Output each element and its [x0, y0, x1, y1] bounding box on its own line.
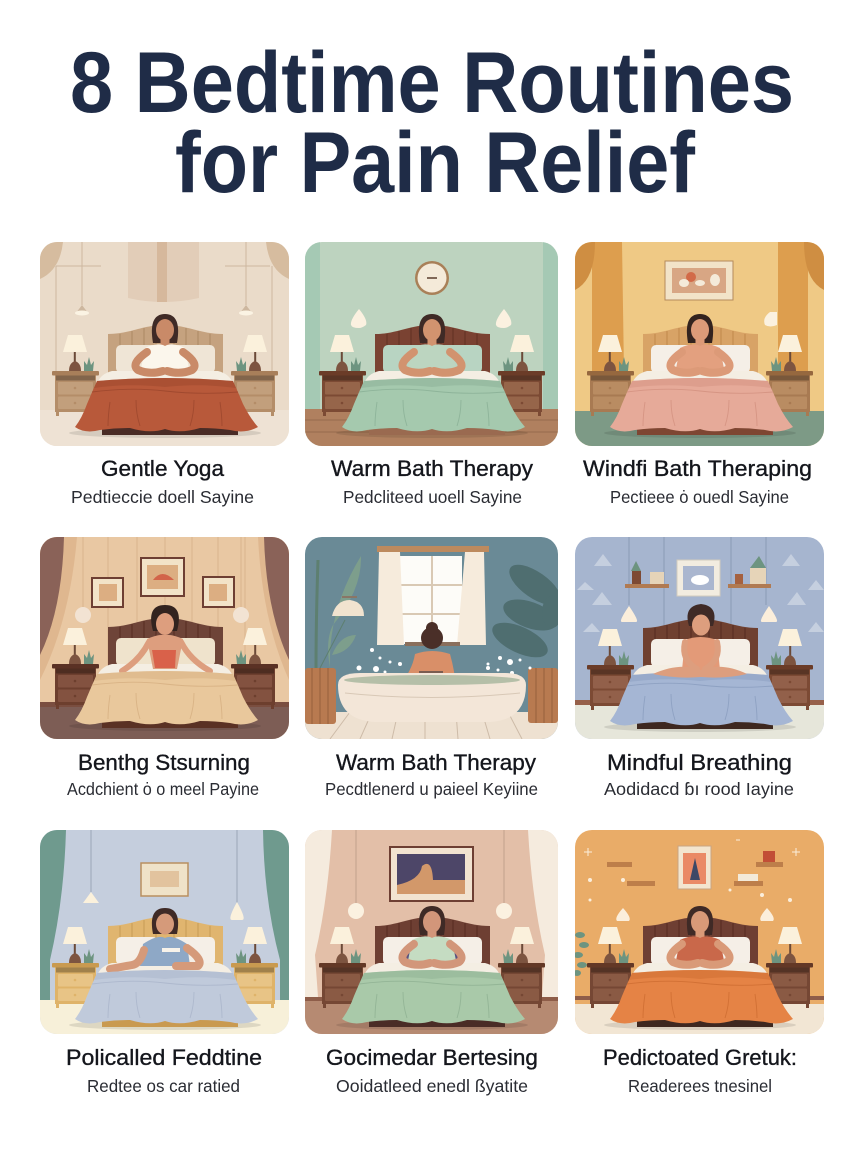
panel: mindful breathing: [575, 537, 824, 739]
person in bath: [408, 622, 454, 673]
label: benthg stsurning: [67, 750, 259, 799]
lamp: [332, 597, 364, 616]
plant left: [305, 556, 361, 724]
shelves with plants: [625, 556, 771, 588]
label: policalled feddtine: Policalled Feddtine: [66, 1045, 262, 1070]
label: gocimedar bertesing: Gocimedar Bertesing: [326, 1045, 538, 1070]
label: mindful breathing: [604, 750, 794, 799]
framed picture: [141, 863, 188, 896]
title: [70, 35, 794, 211]
label: gentle yoga: [71, 456, 254, 507]
bed with person: [587, 906, 813, 1030]
label: policalled feddtine: Redtee os car ratied: [87, 1076, 240, 1096]
shelves and picture: [607, 846, 783, 889]
label: policalled feddtine: [66, 1045, 262, 1096]
panel: warm bath therapy tub: [305, 537, 567, 739]
label: benthg stsurning: Acdchient ȯ o meel Payine: [67, 779, 259, 799]
label: warm bath therapy tub: Pecdtlenerd u paieel Keyiine: [325, 779, 538, 799]
panel: windfi bath theraping: [575, 242, 824, 446]
label: pedictoated gretuk: Readerees tnesinel: [628, 1076, 772, 1096]
bubbles: [356, 648, 532, 675]
label: windfi bath theraping: Windfi Bath Theraping: [583, 456, 812, 481]
panel: warm bath therapy green: [305, 242, 558, 446]
label: benthg stsurning: Benthg Stsurning: [78, 750, 250, 775]
framed picture: [677, 560, 720, 596]
framed picture: [665, 261, 733, 300]
label: windfi bath theraping: [583, 456, 812, 507]
bed with person: [52, 314, 278, 438]
label: warm bath therapy: Warm Bath Therapy: [331, 456, 534, 481]
sparkles: [584, 840, 800, 902]
label: mindful breathing: Mindful Breathing: [607, 750, 792, 775]
label: warm bath therapy tub: Warm Bath Therapy: [336, 750, 537, 775]
icon: wall clock: [415, 261, 449, 295]
label: mindful breathing: Aodidacd ɓı rood Iayine: [604, 779, 794, 799]
bed with person: [52, 908, 278, 1030]
label: warm bath therapy: Pedcliteed uoell Sayine: [343, 487, 522, 507]
label: pedictoated gretuk: [603, 1045, 797, 1096]
panel: gocimedar bertesing: [305, 830, 558, 1034]
framed pictures: [92, 558, 234, 607]
bed with person: [319, 314, 545, 438]
label: gentle yoga: Pedtieccie doell Sayine: [71, 487, 254, 507]
panel: policalled feddtine: [40, 830, 289, 1034]
bathtub: [338, 673, 526, 722]
label: warm bath therapy: [331, 456, 534, 507]
bed with person: [587, 314, 813, 438]
label: gentle yoga: Gentle Yoga: [101, 456, 224, 481]
label: warm bath therapy tub: [325, 750, 538, 799]
framed picture: [390, 847, 473, 901]
title: 8 Bedtime Routines: [70, 35, 794, 131]
pendant lamps: [621, 606, 777, 622]
bed with person: [587, 604, 813, 732]
label: windfi bath theraping: Pectieee ȯ ouedl Sayine: [610, 487, 789, 507]
plant wall: [575, 932, 589, 976]
panel: benthg stsurning: [40, 537, 289, 739]
label: gocimedar bertesing: [326, 1045, 538, 1096]
title: for Pain Relief: [175, 115, 695, 211]
bed with person: [319, 906, 545, 1030]
panel: gentle yoga: [40, 242, 289, 446]
plant right: [492, 564, 558, 723]
bed with person: [52, 605, 278, 731]
window: [377, 546, 489, 646]
label: gocimedar bertesing: Ooidatleed enedl ßyatite: [336, 1076, 528, 1096]
label: pedictoated gretuk: Pedictoated Gretuk:: [603, 1045, 797, 1070]
panel: pedictoated gretuk: [573, 830, 824, 1034]
